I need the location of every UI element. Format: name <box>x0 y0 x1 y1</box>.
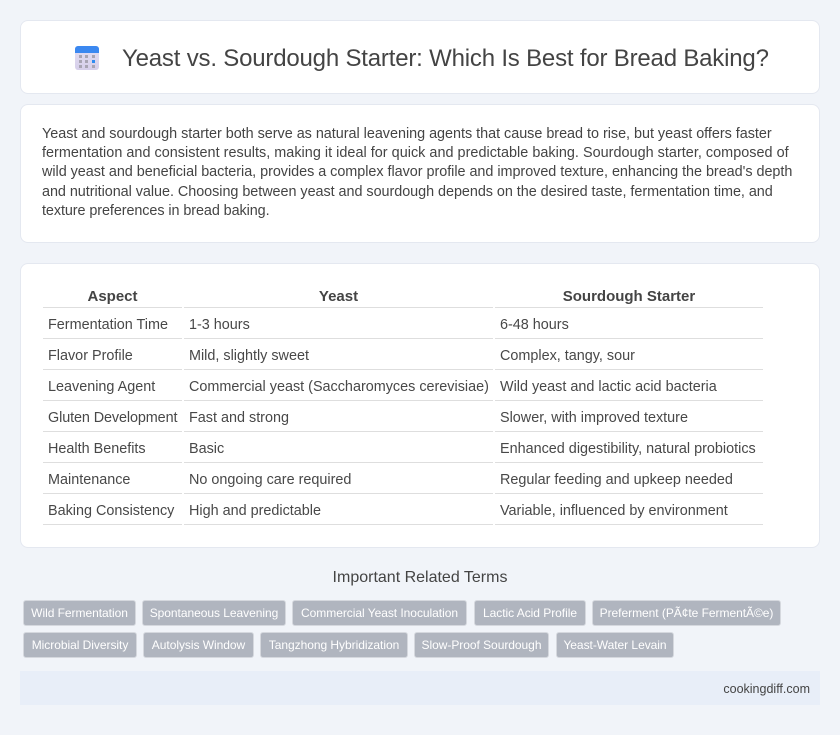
comparison table: Regular feeding and upkeep needed <box>500 472 733 488</box>
comparison table: Gluten Development <box>48 410 177 426</box>
comparison table: Wild yeast and lactic acid bacteria <box>500 379 717 395</box>
comparison table: Complex, tangy, sour <box>500 348 635 364</box>
intro text: and nutritional value. Choosing between yeast and sourdough depends on the desired taste, fermentation time, and <box>42 184 773 200</box>
related terms tags: Autolysis Window <box>152 638 245 652</box>
intro text: fermentation and consistent results, making it ideal for quick and predictable baking. Sourdough starter, composed of <box>42 145 789 161</box>
comparison table: Flavor Profile <box>48 348 133 364</box>
header panel <box>20 20 820 94</box>
comparison table: 1-3 hours <box>189 317 250 333</box>
related terms tags: Commercial Yeast Inoculation <box>301 606 458 620</box>
comparison table: Maintenance <box>48 472 130 488</box>
comparison table: Mild, slightly sweet <box>189 348 309 364</box>
related terms tags: Tangzhong Hybridization <box>269 638 399 652</box>
comparison table: Commercial yeast (Saccharomyces cerevisiae) <box>189 379 489 395</box>
comparison table: Basic <box>189 441 224 457</box>
comparison table: Sourdough Starter <box>563 288 695 305</box>
comparison table: Slower, with improved texture <box>500 410 688 426</box>
title: Yeast vs. Sourdough Starter: Which Is Best for Bread Baking? <box>122 45 769 72</box>
related terms tags: Slow-Proof Sourdough <box>422 638 541 652</box>
comparison table: Yeast <box>319 288 358 305</box>
comparison table: Enhanced digestibility, natural probiotics <box>500 441 756 457</box>
related terms heading: Important Related Terms <box>333 569 507 586</box>
comparison table <box>43 288 763 525</box>
intro text <box>42 126 792 219</box>
footer site name: cookingdiff.com <box>723 682 810 696</box>
related terms tags: Wild Fermentation <box>31 606 128 620</box>
comparison table: No ongoing care required <box>189 472 351 488</box>
footer bar <box>20 671 820 705</box>
icon: calendar <box>75 46 99 70</box>
intro panel <box>20 104 820 243</box>
related terms tags: Spontaneous Leavening <box>150 606 278 620</box>
comparison table: Baking Consistency <box>48 503 174 519</box>
related terms tags: Microbial Diversity <box>32 638 128 652</box>
comparison table: Variable, influenced by environment <box>500 503 728 519</box>
comparison table: Fermentation Time <box>48 317 168 333</box>
comparison table: Leavening Agent <box>48 379 155 395</box>
comparison table: High and predictable <box>189 503 321 519</box>
related terms tags: Preferment (PÃ¢te FermentÃ©e) <box>600 606 773 620</box>
related terms tags: Lactic Acid Profile <box>483 606 577 620</box>
intro text: Yeast and sourdough starter both serve as natural leavening agents that cause bread to rise, but yeast offers faster <box>42 126 772 142</box>
comparison table: Aspect <box>87 288 138 305</box>
table panel <box>20 263 820 548</box>
intro text: texture preferences in bread baking. <box>42 203 270 219</box>
comparison table: Fast and strong <box>189 410 289 426</box>
related terms tags: Yeast-Water Levain <box>563 638 667 652</box>
comparison table: Health Benefits <box>48 441 146 457</box>
intro text: wild yeast and beneficial bacteria, provides a complex flavor profile and improved texture, enhancing the bread's depth <box>42 164 792 180</box>
related terms tags <box>23 600 781 658</box>
comparison table: 6-48 hours <box>500 317 569 333</box>
